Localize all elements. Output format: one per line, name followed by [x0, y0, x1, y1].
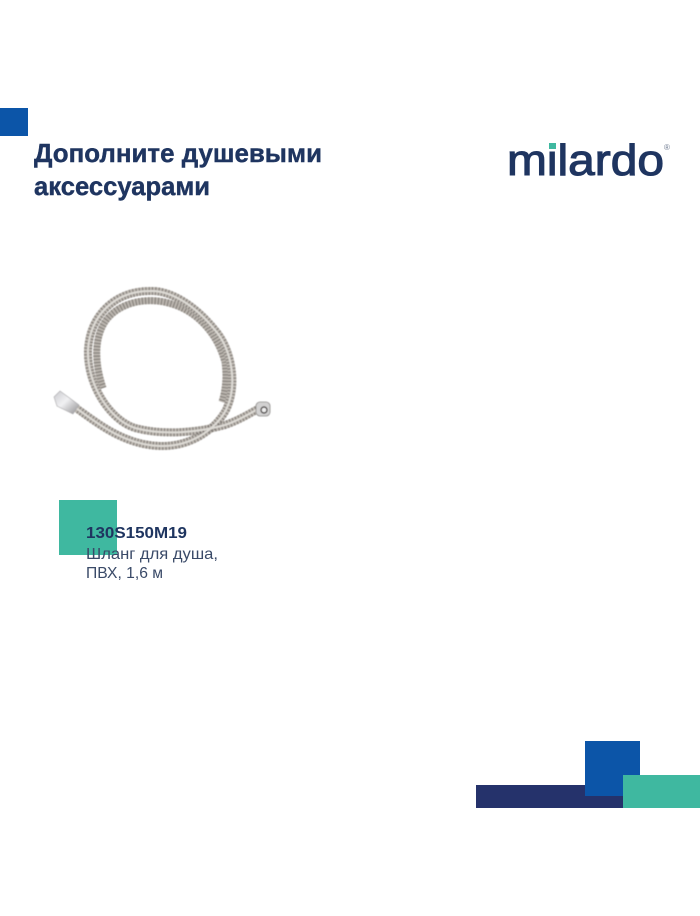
product code: 130S150M19 — [86, 525, 187, 542]
product label — [86, 525, 218, 582]
decorative colour blocks bottom right — [476, 741, 700, 808]
product description: Шланг для душа, — [86, 546, 218, 563]
product description: ПВХ, 1,6 м — [86, 565, 163, 582]
decorative blue square top left — [0, 108, 28, 136]
product description — [86, 546, 218, 582]
hose coil inner strand — [97, 301, 226, 402]
logo: milardo: milardo — [507, 136, 664, 185]
heading — [34, 138, 322, 201]
heading: Дополните душевыми — [34, 138, 322, 168]
logo: milardo: ® — [664, 143, 670, 152]
teal square behind product label — [59, 500, 117, 555]
left conical fitting — [54, 391, 79, 414]
product image: shower hose — [54, 291, 270, 446]
right nut fitting — [256, 402, 270, 416]
hose coil outer strand — [76, 291, 260, 446]
heading: аксессуарами — [34, 171, 210, 201]
